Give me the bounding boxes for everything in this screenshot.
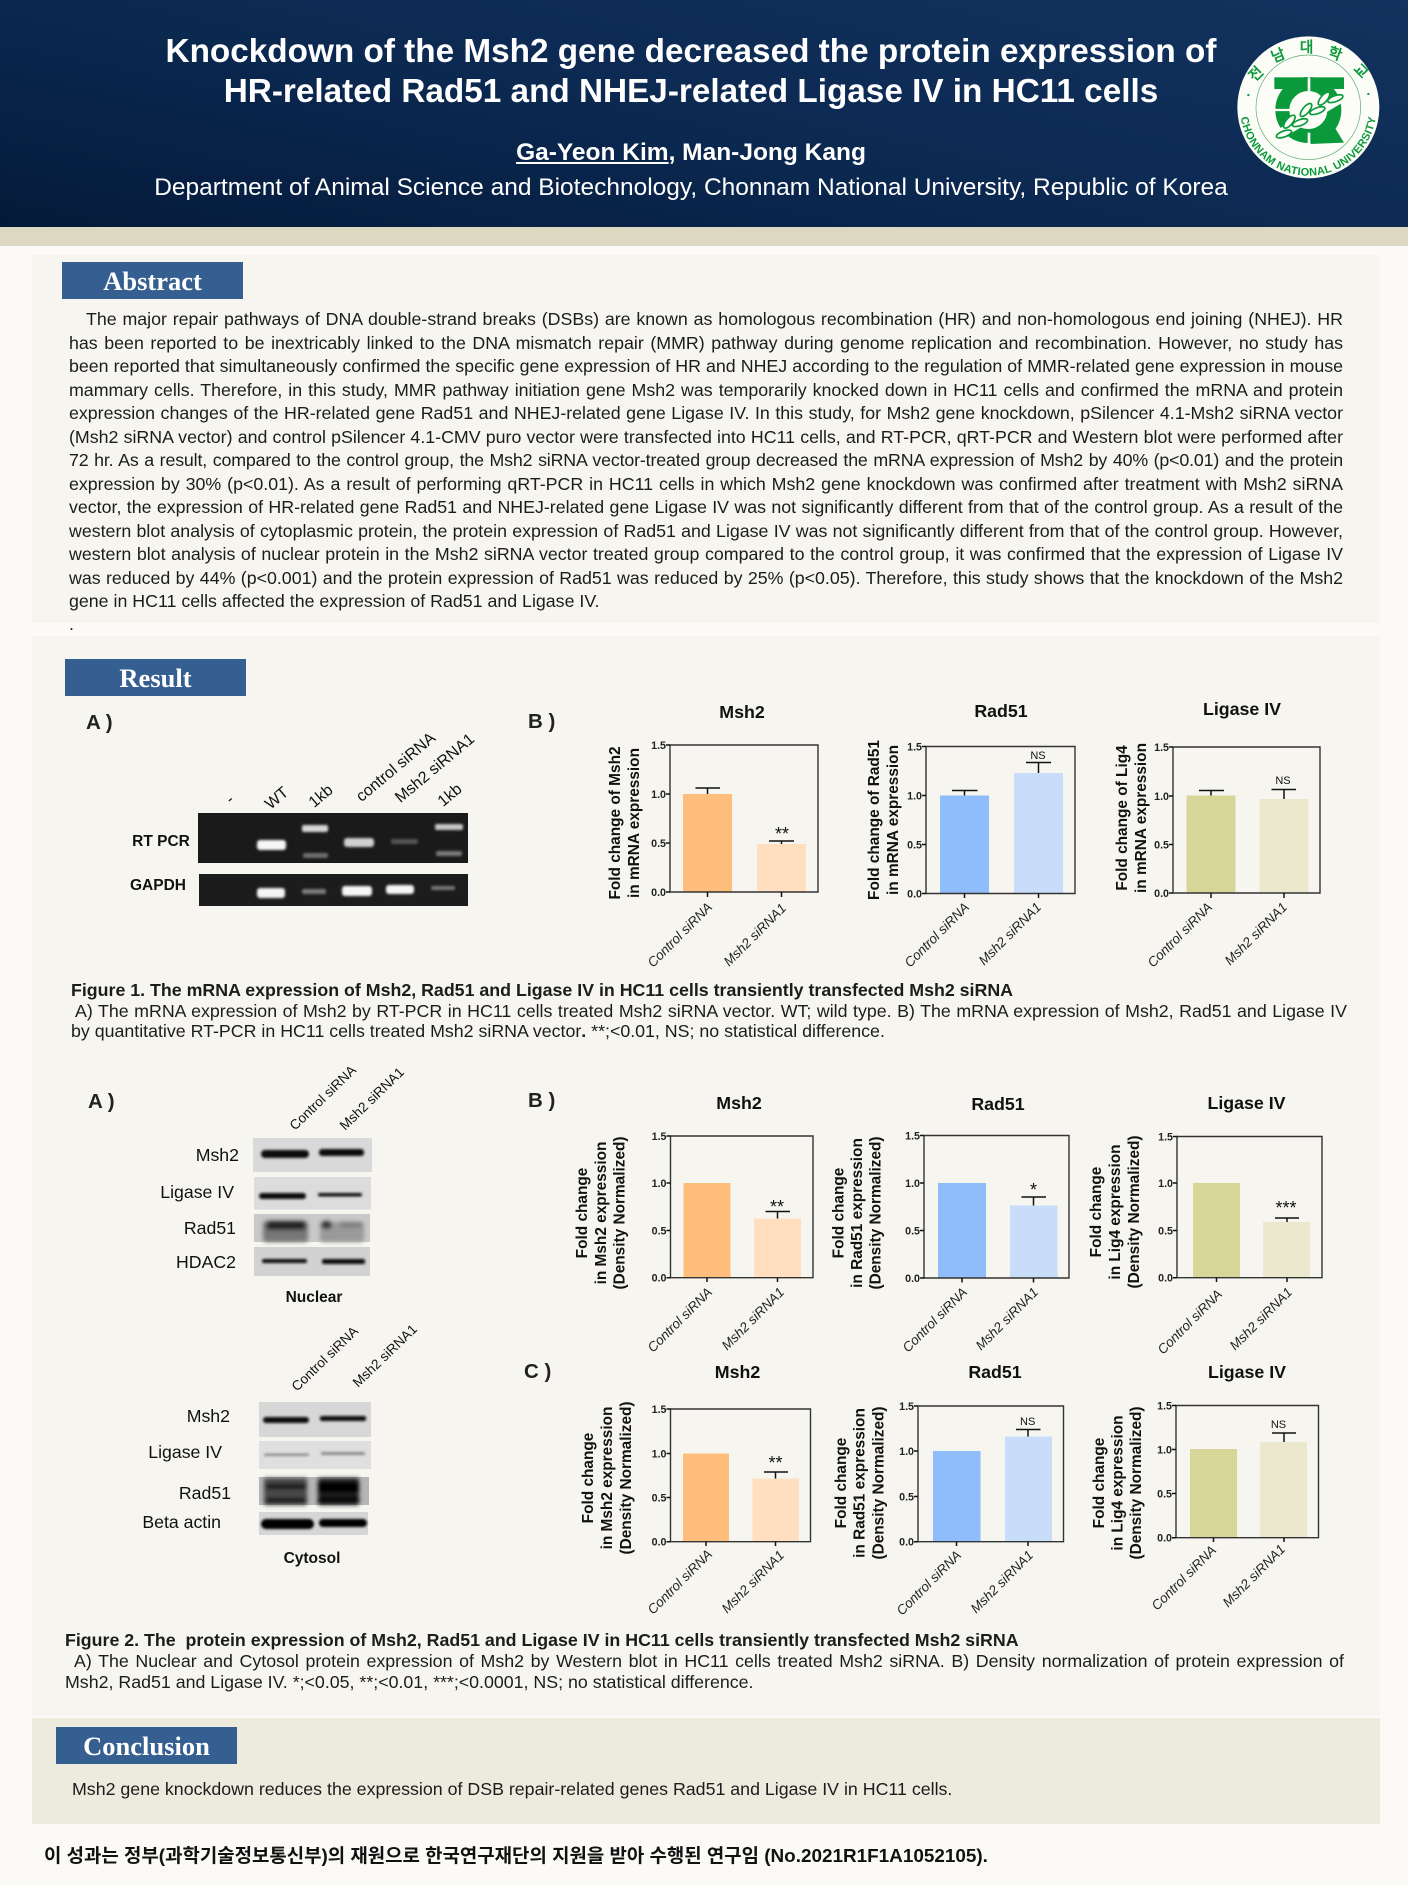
chart: figure 2 C Rad51: (Density Normalized) [870, 1406, 888, 1560]
chart: figure 2 C Msh2: Msh2 siRNA1 [719, 1548, 787, 1616]
western blot: nuclear: Msh2 siRNA1 [337, 1065, 407, 1133]
label: RT PCR: RT PCR [132, 833, 190, 850]
heading: result [65, 659, 246, 696]
chart: figure 2 B Msh2: Msh2 siRNA1 [719, 1285, 787, 1353]
chart: figure 2 C Rad51: Fold change [833, 1437, 850, 1528]
chart: figure 2 B Rad51: * [1030, 1180, 1037, 1200]
western blot: cytosol: Ligase IV [148, 1442, 222, 1462]
chart: figure 2 B Msh2 [574, 1093, 813, 1355]
title: HR-related Rad51 and NHEJ-related Ligase IV in HC11 cells [224, 73, 1158, 110]
chart: figure 1 B Rad51: 1.0 [907, 790, 922, 802]
chart: figure 1 B Rad51: 1.5 [907, 742, 922, 754]
chart: figure 1 B Rad51: Msh2 siRNA1 [976, 900, 1044, 968]
chart: figure 1 B Msh2: Msh2 siRNA1 [721, 901, 789, 969]
title: Knockdown of the Msh2 gene decreased the protein expression of [166, 33, 1216, 70]
chart: figure 1 B Msh2: 1.5 [651, 740, 666, 752]
chart: figure 2 C Ligase IV: (Density Normalized) [1128, 1406, 1145, 1560]
western blot: nuclear: Ligase IV [160, 1182, 234, 1202]
chart: figure 2 C Rad51: in Rad51 expression [852, 1408, 868, 1558]
abstract text: was reduced by 44% (p<0.001) and the protein expression of Rad51 was reduced by 25% (p<0.05). Therefore, this study shows that the knockdown of the Msh2 [69, 568, 1343, 588]
chart: figure 2 C Msh2: ** [768, 1453, 783, 1473]
chart: figure 2 C Rad51: 0.0 [899, 1537, 914, 1549]
header banner [0, 0, 1408, 227]
abstract text: has been reported to be inextricably linked to the DNA mismatch repair (MMR) pathway during genome replication and recombination. However, no study has [69, 332, 1343, 352]
western blot: cytosol: Rad51 [179, 1483, 231, 1503]
chart: figure 2 C Ligase IV: NS [1271, 1419, 1286, 1431]
chart: figure 2 B Msh2: (Density Normalized) [612, 1136, 628, 1290]
chart: figure 2 C Ligase IV: 0.5 [1157, 1488, 1172, 1500]
beige band [0, 227, 1408, 246]
chart: figure 2 C Msh2: Control siRNA [645, 1546, 715, 1617]
heading: abstract [62, 262, 243, 299]
blot: cytosol Rad51 [259, 1477, 369, 1505]
western blot: cytosol: Control siRNA [289, 1323, 362, 1394]
chart: figure 2 C Rad51: NS [1020, 1416, 1035, 1428]
chart: figure 1 B Rad51 [866, 701, 1075, 970]
icon: university logo: 교 [1350, 61, 1371, 82]
authors: Ga-Yeon Kim, Man-Jong Kang [516, 139, 866, 166]
blot: nuclear Rad51 [254, 1214, 370, 1242]
western blot: nuclear [160, 1062, 407, 1306]
icon: university logo: 학 [1326, 44, 1345, 65]
chart: figure 2 C Ligase IV: in Lig4 expression [1110, 1415, 1126, 1551]
gel lane labels: Msh2 siRNA1 [392, 731, 478, 807]
western blot: cytosol: Beta actin [142, 1512, 221, 1532]
chart: figure 2 B Ligase IV [1088, 1093, 1322, 1357]
chart: figure 2 C Ligase IV: 1.5 [1157, 1400, 1172, 1412]
western blot: nuclear: Nuclear [286, 1289, 342, 1306]
chart: figure 2 B Ligase IV: in Lig4 expression [1107, 1144, 1124, 1280]
abstract text: 72 hr. As a result, compared to the control group, the Msh2 siRNA vector-treated group decreased the mRNA expression of Msh2 by 40% (p<0.01) and the protein [69, 450, 1343, 470]
chart: figure 2 C Rad51 [833, 1362, 1064, 1618]
chart: figure 2 B Ligase IV: 0.0 [1158, 1273, 1173, 1285]
panel: result [32, 636, 1380, 1715]
heading: result: Result [119, 663, 192, 693]
chart: figure 2 C Rad51: 1.0 [899, 1446, 914, 1458]
panel label: figure 2 C: C ) [524, 1360, 551, 1383]
chart: figure 1 B Rad51: 0.5 [907, 840, 922, 852]
panel label: figure 2 B: B ) [528, 1089, 555, 1112]
abstract text: The major repair pathways of DNA double-strand breaks (DSBs) are known as homologous recombination (HR) and non-homologous end joining (NHEJ). HR [86, 309, 1343, 329]
western blot: cytosol: Msh2 [187, 1406, 230, 1426]
gel image: GAPDH [199, 874, 468, 906]
chart: figure 2 C Ligase IV [1091, 1362, 1318, 1613]
western blot: nuclear: Rad51 [184, 1218, 236, 1238]
chart: figure 2 B Rad51 [830, 1094, 1069, 1355]
chart: figure 2 C Ligase IV: Msh2 siRNA1 [1220, 1542, 1288, 1610]
western blot: cytosol [142, 1322, 420, 1567]
abstract text: vector, the expression of HR-related gene Rad51 and NHEJ-related gene Ligase IV was not significantly different from that of the control group. As a result of the [69, 497, 1343, 517]
chart: figure 2 B Msh2: 0.5 [652, 1226, 667, 1238]
icon: university logo: 남 [1269, 45, 1288, 66]
chart: figure 1 B Rad51: 0.0 [907, 888, 922, 900]
figure 1 caption: A) The mRNA expression of Msh2 by RT-PCR in HC11 cells treated Msh2 siRNA vector. WT; wild type. B) The mRNA expression of Msh2, Rad51 and Ligase IV [75, 1000, 1347, 1020]
chart: figure 2 B Rad51: 0.5 [905, 1226, 920, 1238]
chart: figure 2 B Ligase IV: Ligase IV [1207, 1093, 1286, 1113]
chart: figure 1 B Ligase IV: Ligase IV [1203, 699, 1281, 719]
chart: figure 1 B Msh2: 0.5 [651, 838, 666, 850]
chart: figure 2 C Ligase IV: Fold change [1091, 1437, 1108, 1528]
figure 2 caption: A) The Nuclear and Cytosol protein expression of Msh2 by Western blot in HC11 cells treated Msh2 siRNA. B) Density normalization of protein expression of [74, 1650, 1344, 1670]
blot: nuclear Msh2 [253, 1138, 372, 1172]
chart: figure 2 B Msh2: Msh2 [716, 1093, 762, 1113]
abstract text: been reported that simultaneously confirmed the specific gene expression of HR and NHEJ according to the regulation of MMR-related gene expression in mouse [69, 356, 1343, 376]
figure 2 caption [65, 1630, 1344, 1692]
chart: figure 2 B Msh2: Control siRNA [645, 1284, 715, 1355]
chart: figure 2 B Rad51: Rad51 [971, 1094, 1025, 1114]
chart: figure 1 B Msh2 [607, 702, 818, 970]
chart: figure 2 B Msh2: ** [770, 1197, 784, 1217]
chart: figure 2 B Ligase IV: Control siRNA [1155, 1286, 1225, 1357]
chart: figure 1 B Msh2: Fold change of Msh2 [607, 746, 624, 900]
western blot: nuclear: Msh2 [196, 1145, 239, 1165]
abstract text: mammary cells. Therefore, in this study, MMR pathway initiation gene Msh2 was temporarily knocked down in HC11 cells and confirmed the mRNA and protein [69, 380, 1343, 400]
gel image: RT PCR [198, 813, 468, 863]
chart: figure 1 B Ligase IV: 1.0 [1154, 791, 1169, 803]
chart: figure 2 B Ligase IV: Fold change [1088, 1166, 1105, 1257]
chart: figure 2 B Ligase IV: *** [1275, 1198, 1297, 1218]
abstract text: western blot analysis of cytoplasmic protein, the protein expression of Rad51 and Ligase IV was not significantly different from that of the control group. However, [69, 520, 1343, 540]
figure 2 caption: Figure 2. The protein expression of Msh2, Rad51 and Ligase IV in HC11 cells transiently transfected Msh2 siRNA [65, 1630, 1019, 1650]
western blot: nuclear: Control siRNA [287, 1062, 360, 1133]
chart: figure 2 C Rad51: Msh2 siRNA1 [968, 1548, 1036, 1616]
chart: figure 1 B Msh2: ** [775, 824, 789, 844]
chart: figure 2 C Rad51: Control siRNA [894, 1547, 964, 1618]
chart: figure 2 C Rad51: Rad51 [968, 1362, 1022, 1382]
chart: figure 1 B Msh2: in mRNA expression [626, 748, 643, 898]
chart: figure 2 B Rad51: Msh2 siRNA1 [973, 1285, 1041, 1353]
chart: figure 1 B Rad51: Control siRNA [902, 899, 972, 970]
blot: cytosol Ligase IV [259, 1441, 371, 1469]
chart: figure 2 B Rad51: 1.0 [905, 1178, 920, 1190]
panel label: figure 2 A: A ) [88, 1090, 115, 1113]
chart: figure 1 B Msh2: 1.0 [651, 789, 666, 801]
chart: figure 1 B Msh2: 0.0 [651, 887, 666, 899]
chart: figure 1 B Ligase IV: Control siRNA [1145, 899, 1215, 970]
heading: conclusion: Conclusion [83, 1731, 210, 1761]
figure 2 caption: Msh2, Rad51 and Ligase IV. *;<0.05, **;<0.01, ***;<0.0001, NS; no statistical difference. [65, 1672, 754, 1692]
chart: figure 2 C Msh2 [580, 1362, 810, 1617]
chart: figure 2 B Msh2: in Msh2 expression [593, 1142, 610, 1284]
chart: figure 1 B Rad51: NS [1030, 750, 1046, 762]
chart: figure 1 B Ligase IV: Msh2 siRNA1 [1222, 900, 1290, 968]
chart: figure 2 B Rad51: Control siRNA [900, 1284, 970, 1355]
chart: figure 2 C Ligase IV: 1.0 [1157, 1444, 1172, 1456]
chart: figure 2 B Msh2: 1.0 [652, 1178, 667, 1190]
chart: figure 2 B Ligase IV: Msh2 siRNA1 [1227, 1285, 1295, 1353]
panel label: figure 1 B: B ) [528, 710, 555, 733]
chart: figure 2 C Msh2: 0.0 [652, 1537, 667, 1549]
abstract text: expression changes of the HR-related gene Rad51 and NHEJ-related gene Ligase IV. In this study, for Msh2 gene knockdown, pSilencer 4.1-Msh2 siRNA vector [69, 403, 1343, 423]
icon: university logo: 대 [1300, 39, 1313, 56]
blot: nuclear Ligase IV [254, 1177, 371, 1210]
gel lane labels: - [223, 791, 238, 808]
stray period: . [69, 614, 74, 634]
chart: figure 2 C Msh2: (Density Normalized) [618, 1401, 635, 1555]
chart: figure 2 B Rad51: Fold change [830, 1167, 848, 1258]
chart: figure 2 B Ligase IV: 1.0 [1158, 1178, 1173, 1190]
blot: cytosol Msh2 [259, 1402, 371, 1437]
chart: figure 2 C Msh2: Fold change [580, 1432, 597, 1523]
funding acknowledgement: 이 성과는 정부(과학기술정보통신부)의 재원으로 한국연구재단의 지원을 받아 수행된 연구임 (No.2021R1F1A1052105). [44, 1846, 988, 1867]
gel lane labels [223, 729, 478, 813]
chart: figure 1 B Ligase IV: NS [1275, 775, 1291, 787]
chart: figure 1 B Ligase IV: in mRNA expression [1133, 743, 1150, 893]
chart: figure 2 B Ligase IV: 1.5 [1158, 1132, 1173, 1144]
chart: figure 2 B Msh2: 1.5 [652, 1131, 667, 1143]
chart: figure 1 B Rad51: Rad51 [974, 701, 1028, 721]
chart: figure 2 B Ligase IV: (Density Normalized) [1126, 1135, 1143, 1289]
chart: figure 1 B Ligase IV: 1.5 [1154, 742, 1169, 754]
blot: cytosol Beta actin [259, 1512, 368, 1535]
panel: conclusion [32, 1718, 1380, 1824]
chart: figure 2 C Ligase IV: Ligase IV [1208, 1362, 1286, 1382]
chart: figure 1 B Rad51: in mRNA expression [885, 745, 902, 895]
panel label: figure 1 A: A ) [86, 711, 113, 734]
chart: figure 2 C Rad51: 1.5 [899, 1401, 914, 1413]
chart: figure 2 B Rad51: 1.5 [905, 1130, 920, 1142]
chart: figure 2 C Msh2: Msh2 [715, 1362, 760, 1382]
gel lane labels: 1kb [435, 781, 466, 810]
label: GAPDH: GAPDH [130, 877, 186, 894]
chart: figure 2 B Rad51: (Density Normalized) [868, 1136, 884, 1290]
chart: figure 2 C Msh2: 0.5 [652, 1492, 667, 1504]
gel lane labels: control siRNA [353, 729, 439, 806]
chart: figure 2 C Rad51: 0.5 [899, 1492, 914, 1504]
icon: university logo: CHONNAM NATIONAL UNIVERSITY [1241, 116, 1376, 176]
title [166, 33, 1217, 110]
chart: figure 1 B Msh2: Msh2 [719, 702, 765, 722]
chart: figure 2 B Msh2: 0.0 [652, 1273, 667, 1285]
icon: university logo: 전 [1245, 63, 1267, 85]
gel: RT PCR and GAPDH [130, 729, 478, 906]
gel lane labels: 1kb [306, 782, 337, 811]
abstract text: expression by 30% (p<0.01). As a result of performing qRT-PCR in HC11 cells in which Msh2 gene knockdown was confirmed after treatment with Msh2 siRNA [69, 474, 1343, 494]
chart: figure 1 B Rad51: Fold change of Rad51 [866, 740, 883, 900]
panel: abstract [32, 255, 1380, 623]
chart: figure 2 C Ligase IV: Control siRNA [1149, 1542, 1219, 1613]
western blot: cytosol: Msh2 siRNA1 [350, 1322, 420, 1390]
blot: nuclear HDAC2 [254, 1247, 370, 1276]
western blot: cytosol: Cytosol [284, 1550, 340, 1567]
abstract text: western blot analysis of nuclear protein in the Msh2 siRNA vector treated group compared to the control group, it was confirmed that the expression of Ligase IV [69, 544, 1343, 564]
figure 1 caption [71, 980, 1347, 1041]
heading: abstract: Abstract [103, 266, 202, 296]
chart: figure 1 B Ligase IV: 0.0 [1154, 888, 1169, 900]
heading: conclusion [56, 1727, 237, 1764]
chart: figure 2 B Msh2: Fold change [574, 1167, 591, 1258]
chart: figure 2 C Msh2: 1.0 [652, 1448, 667, 1460]
chart: figure 2 B Ligase IV: 0.5 [1158, 1226, 1173, 1238]
gel lane labels: WT [262, 784, 292, 813]
chart: figure 2 C Ligase IV: 0.0 [1157, 1533, 1172, 1545]
chart: figure 2 B Rad51: 0.0 [905, 1273, 920, 1285]
figure 1 caption: Figure 1. The mRNA expression of Msh2, Rad51 and Ligase IV in HC11 cells transiently transfected Msh2 siRNA [71, 980, 1013, 1000]
icon: university logo [1237, 36, 1380, 178]
chart: figure 2 B Rad51: in Rad51 expression [849, 1138, 866, 1288]
abstract text: (Msh2 siRNA vector) and control pSilencer 4.1-CMV puro vector were transfected into HC11 cells, and RT-PCR, qRT-PCR and Western blot were performed after [69, 426, 1343, 446]
chart: figure 1 B Ligase IV: 0.5 [1154, 840, 1169, 852]
chart: figure 1 B Ligase IV [1114, 699, 1320, 970]
western blot: nuclear: HDAC2 [176, 1252, 236, 1272]
figure 1 caption: by quantitative RT-PCR in HC11 cells treated Msh2 siRNA vector. **;<0.01, NS; no statistical difference. [71, 1021, 885, 1041]
chart: figure 2 C Msh2: in Msh2 expression [599, 1407, 616, 1549]
chart: figure 2 C Msh2: 1.5 [652, 1404, 667, 1416]
conclusion text: Msh2 gene knockdown reduces the expression of DSB repair-related genes Rad51 and Ligase IV in HC11 cells. [72, 1779, 952, 1799]
abstract text: gene in HC11 cells affected the expression of Rad51 and Ligase IV. [69, 591, 600, 611]
abstract text [69, 309, 1343, 611]
affiliation: Department of Animal Science and Biotechnology, Chonnam National University, Republic of Korea [154, 174, 1228, 200]
chart: figure 1 B Ligase IV: Fold change of Lig4 [1114, 745, 1131, 891]
chart: figure 1 B Msh2: Control siRNA [645, 899, 715, 970]
